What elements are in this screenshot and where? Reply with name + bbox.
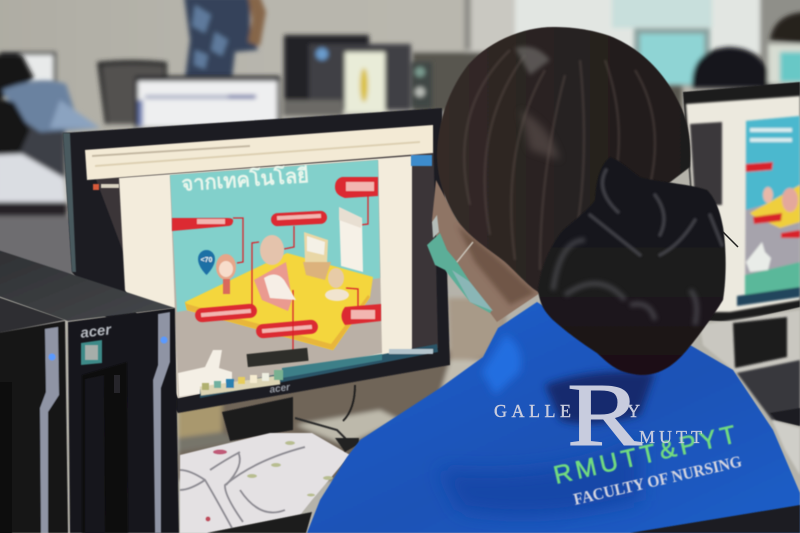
background student left <box>0 55 100 276</box>
watermark gallery word: GALLE <box>494 401 571 421</box>
tower brand: acer <box>79 321 113 342</box>
monitor stand <box>222 397 293 441</box>
green embroidery: RMUTT&PYT <box>551 421 739 490</box>
student shirt <box>307 302 800 533</box>
background wall <box>0 0 800 142</box>
intel sticker <box>81 340 102 365</box>
hair bun with black scrunchie <box>538 157 738 375</box>
slide media toolbar <box>247 348 309 367</box>
background desk <box>700 310 800 373</box>
hair highlights <box>515 46 550 75</box>
location pin <box>198 250 215 275</box>
watermark y: Y <box>627 401 640 421</box>
pc tower right <box>0 250 179 533</box>
tower front <box>68 308 179 533</box>
faculty embroidery: FACULTY OF NURSING <box>572 452 743 509</box>
yellow floor <box>185 253 373 350</box>
hair <box>437 27 691 293</box>
silver stripe <box>153 312 170 533</box>
characters <box>178 207 363 397</box>
keyboard <box>737 360 800 425</box>
bottom dark strip <box>630 505 800 533</box>
screen white <box>686 96 800 312</box>
slide title: จากเทคโนโลยี <box>181 163 310 196</box>
background monitors and chair <box>0 35 432 128</box>
right monitor <box>683 82 800 475</box>
right infographic <box>737 116 800 306</box>
red labels <box>172 177 381 352</box>
monitor bezel <box>63 108 450 413</box>
infographic panel <box>170 160 382 398</box>
stand <box>733 317 787 368</box>
neck and face skin <box>432 180 540 322</box>
drive bay <box>82 362 128 533</box>
background presenter <box>184 0 266 78</box>
browser toolbar <box>85 125 433 190</box>
tower top <box>0 250 175 321</box>
bezel <box>683 82 800 322</box>
hair strands <box>464 50 655 270</box>
windows taskbar <box>200 344 438 398</box>
desk surface <box>178 298 505 480</box>
notebook with tree drawing <box>180 433 350 533</box>
main monitor <box>63 108 450 441</box>
scrunchie folds <box>590 170 722 255</box>
background people top right <box>634 12 800 88</box>
watermark rmutt: MUTT <box>639 427 702 447</box>
power led <box>160 336 168 344</box>
red connector lines <box>233 195 368 352</box>
characters: <70 <box>201 257 213 264</box>
dark side panel <box>690 122 722 205</box>
label text <box>197 182 375 333</box>
monitor brand logo: acer <box>269 382 292 396</box>
gallery watermark <box>494 366 702 465</box>
pointing hand <box>178 350 232 397</box>
shirt shadow <box>545 371 655 424</box>
slide white page <box>119 156 412 398</box>
pc tower left <box>0 297 68 533</box>
watermark big R: R <box>567 366 642 465</box>
face mask <box>427 215 493 313</box>
satin highlights <box>553 240 697 325</box>
desk clutter <box>207 385 359 533</box>
